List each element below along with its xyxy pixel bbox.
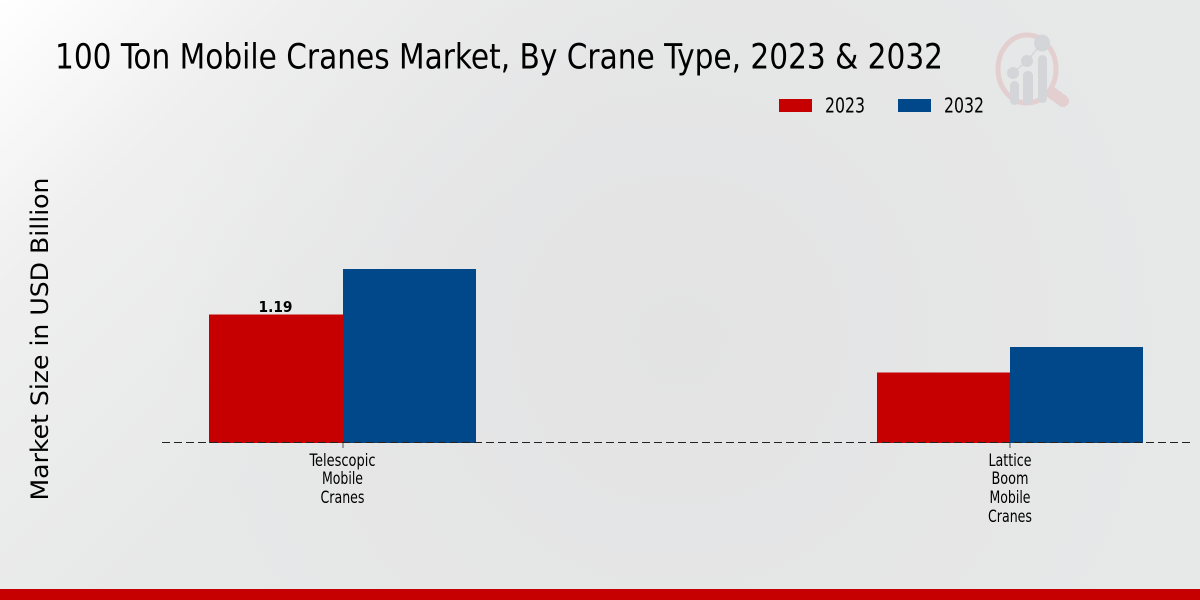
legend item: 2032 <box>898 94 984 118</box>
legend item: 2023 <box>779 94 865 118</box>
category label: Lattice Boom Mobile Cranes: Mobile <box>990 488 1030 507</box>
title: 100 Ton Mobile Cranes Market, By Crane Type, 2023 & 2032 <box>55 38 943 78</box>
category label: Telescopic Mobile Cranes: Telescopic <box>309 451 376 470</box>
category label: Lattice Boom Mobile Cranes: Boom <box>992 469 1028 488</box>
category label: Lattice Boom Mobile Cranes <box>988 451 1032 526</box>
legend item: 2023: 2023 <box>825 94 865 118</box>
footer bar <box>0 589 1200 600</box>
group: Lattice Boom Mobile Cranes <box>877 347 1143 443</box>
category label: Telescopic Mobile Cranes: Cranes <box>320 488 365 507</box>
y-axis label: Market Size in USD Billion <box>26 178 54 500</box>
legend item: 2032: 2032 <box>944 94 984 118</box>
category label: Telescopic Mobile Cranes: Mobile <box>322 469 363 488</box>
category label: Lattice Boom Mobile Cranes: Cranes <box>988 507 1032 526</box>
category label: Telescopic Mobile Cranes <box>309 451 376 507</box>
bar chart <box>162 269 1190 448</box>
data label: 1.19 <box>258 298 292 316</box>
watermark logo icon <box>998 34 1063 105</box>
legend <box>779 94 984 118</box>
category label: Lattice Boom Mobile Cranes: Lattice <box>988 451 1032 470</box>
baseline axis <box>162 442 1190 444</box>
group: Telescopic Mobile Cranes <box>209 269 476 443</box>
